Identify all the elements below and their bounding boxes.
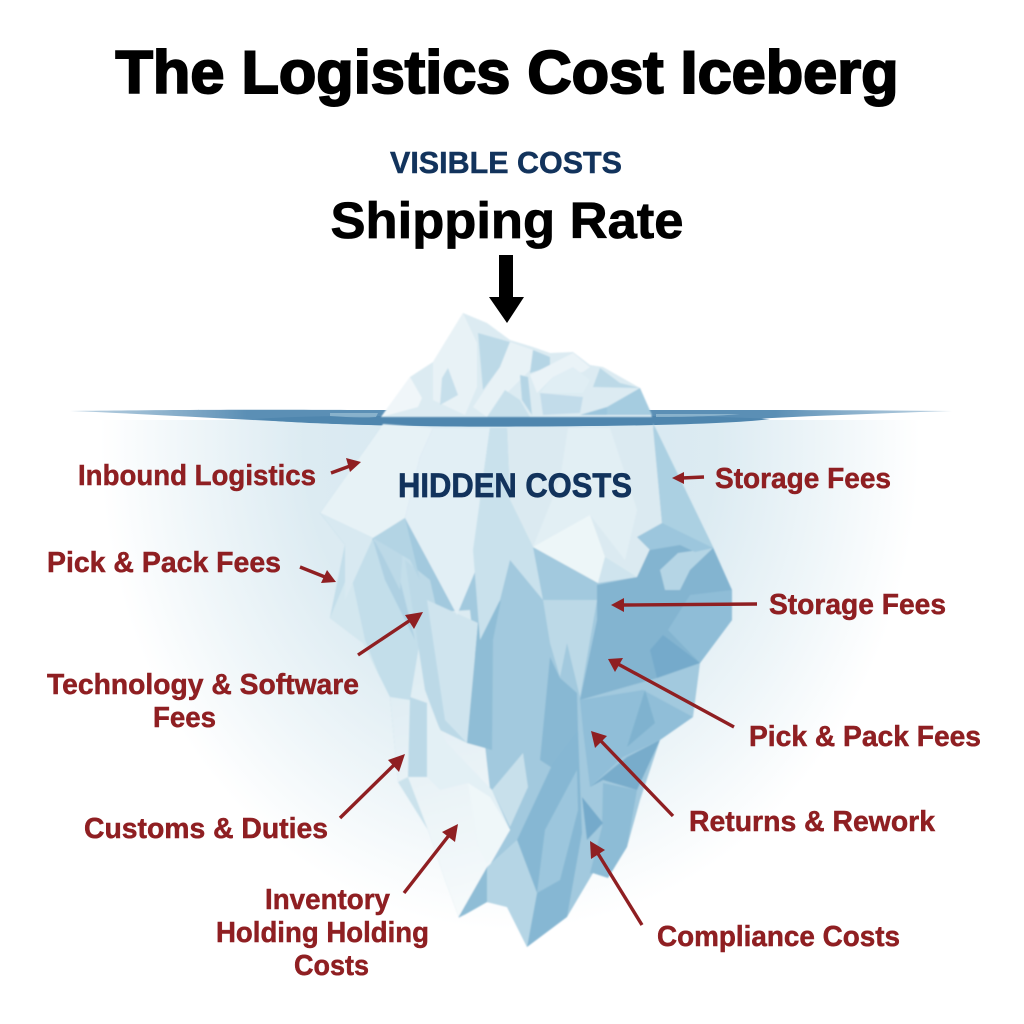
underwater glow: [60, 420, 960, 1000]
label: inventory holding costs: Inventory: [265, 884, 390, 916]
iceberg tip above water: [381, 313, 652, 417]
visible costs heading: VISIBLE COSTS: [390, 145, 622, 180]
shipping rate label: Shipping Rate: [330, 192, 684, 249]
arrow: inventory holding: [404, 824, 458, 893]
label: pick and pack fees right: Pick & Pack Fees: [749, 721, 981, 753]
iceberg submerged body: [310, 423, 740, 958]
arrow: inbound logistics: [331, 458, 361, 473]
arrow: customs and duties: [340, 754, 405, 818]
arrow: storage fees upper: [672, 472, 704, 484]
arrow: pick and pack left: [300, 567, 336, 583]
label: inventory holding costs: Holding Holding: [216, 917, 429, 949]
label: inbound logistics: Inbound Logistics: [78, 460, 316, 492]
arrow: storage fees lower: [611, 598, 757, 612]
label: inventory holding costs: Costs: [294, 950, 369, 982]
arrow: technology and software: [358, 612, 423, 655]
label: storage fees lower: Storage Fees: [769, 589, 946, 621]
label: returns and rework: Returns & Rework: [689, 806, 936, 838]
label: technology and software fees: Technology & Software: [47, 669, 359, 701]
waterline: [70, 410, 952, 427]
arrow: pick and pack right: [608, 658, 734, 727]
label: storage fees upper: Storage Fees: [715, 463, 891, 495]
arrow: returns and rework: [591, 731, 673, 816]
title: The Logistics Cost Iceberg: [116, 39, 898, 106]
iceberg: [310, 313, 740, 958]
hidden costs heading: HIDDEN COSTS: [398, 467, 632, 505]
label: customs and duties: Customs & Duties: [84, 813, 328, 845]
label: inventory holding costs: [216, 884, 429, 982]
arrow: compliance costs: [590, 841, 642, 925]
label: technology and software fees: [47, 669, 359, 734]
label: pick and pack fees left: Pick & Pack Fees: [47, 547, 281, 579]
arrow: shipping rate down to tip: [489, 255, 524, 323]
label: compliance costs: Compliance Costs: [657, 921, 900, 953]
label: technology and software fees: Fees: [153, 702, 216, 734]
